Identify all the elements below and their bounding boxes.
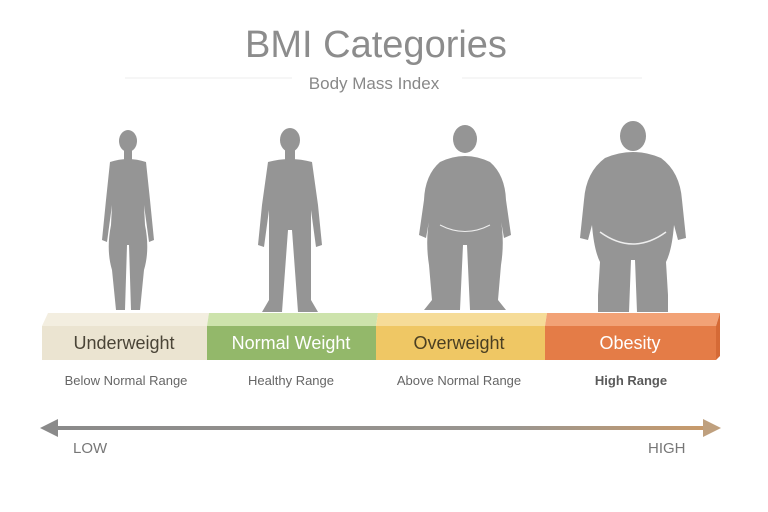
range labels: Above Normal Range: [397, 373, 521, 388]
segment: underweight: Underweight: [73, 333, 175, 353]
segment: obesity: Obesity: [599, 333, 661, 353]
bar: categories: [42, 313, 720, 360]
segment: overweight: Overweight: [413, 333, 505, 353]
range labels: [65, 373, 667, 388]
segment: underweight: [42, 313, 209, 360]
segment: normal: Normal Weight: [232, 333, 350, 353]
figure: normal: [258, 128, 322, 312]
label: high: HIGH: [648, 440, 686, 457]
subtitle: Body Mass Index: [309, 74, 440, 93]
label: low: LOW: [73, 440, 108, 457]
range labels: Healthy Range: [248, 373, 334, 388]
segment: normal: [207, 313, 378, 360]
segment: overweight: [376, 313, 547, 360]
arrow: low to high: [40, 419, 721, 437]
title: BMI Categories: [245, 24, 507, 66]
figure: obesity: [580, 121, 686, 312]
segment: obesity: [545, 313, 720, 360]
figure: overweight: [419, 125, 511, 310]
range labels: Below Normal Range: [65, 373, 187, 388]
figure: underweight: [102, 130, 154, 310]
range labels: High Range: [595, 373, 667, 388]
